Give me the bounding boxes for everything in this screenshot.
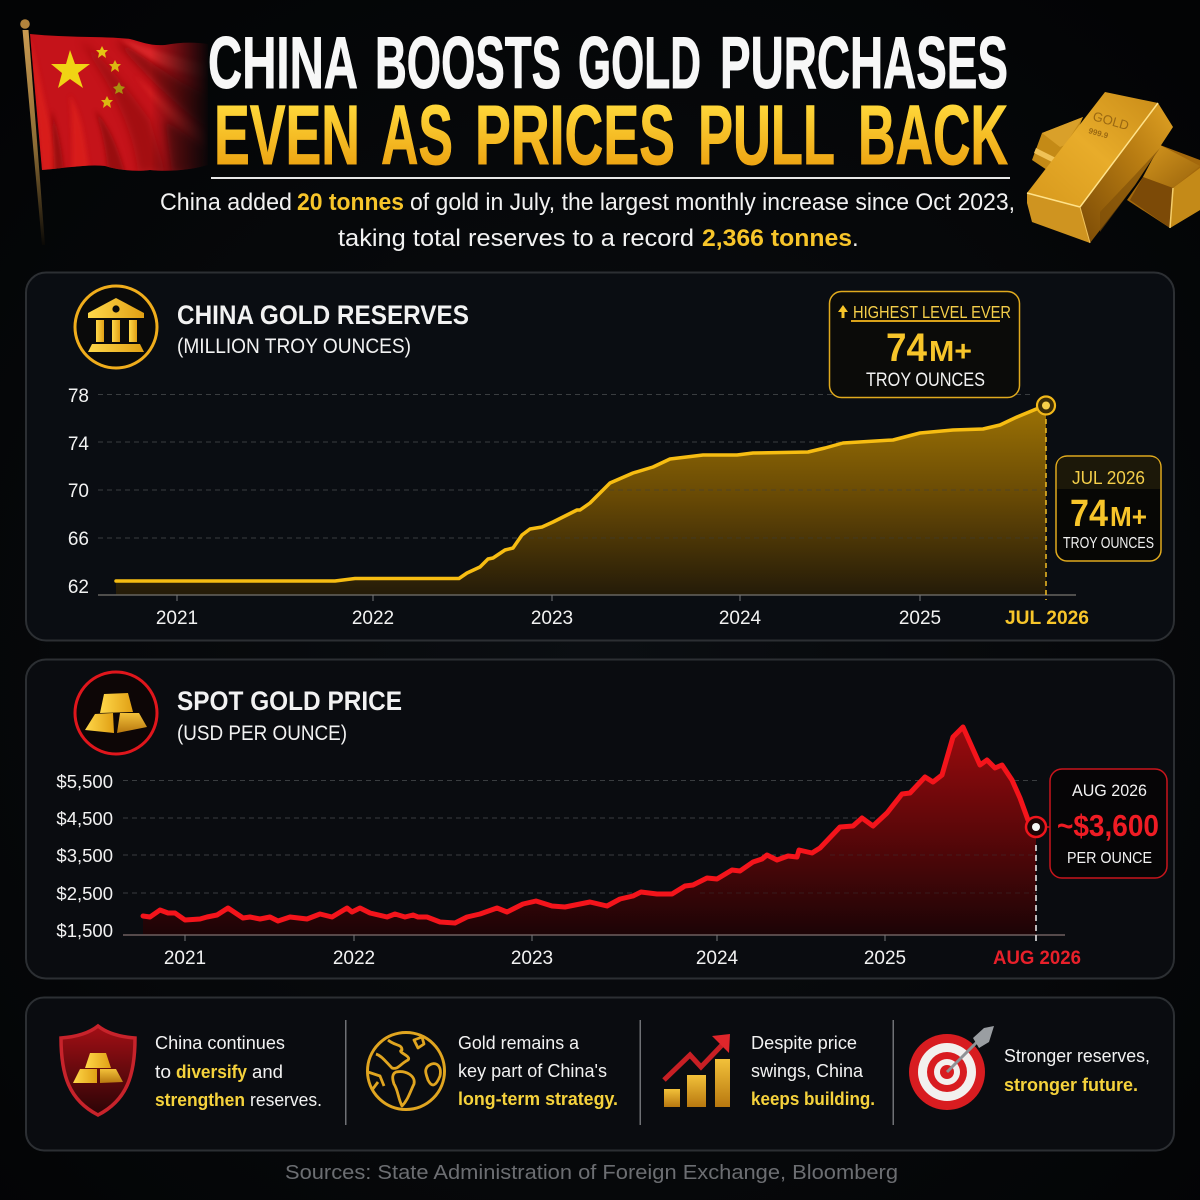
title line 1: GOLD [578, 23, 701, 104]
item: keeps building: keeps building. [751, 1088, 875, 1109]
callout: jul 2026: M+ [1110, 501, 1147, 532]
line chart: gold price: $3,500 [56, 845, 113, 866]
line chart: reserves [68, 386, 1089, 629]
line chart: gold price [56, 727, 1081, 969]
callout: highest level ever: HIGHEST LEVEL EVER [853, 302, 1011, 322]
item: diversify: diversify [176, 1061, 248, 1082]
line chart: gold price: AUG 2026 [993, 948, 1081, 969]
item: stronger future [909, 1026, 1150, 1110]
line chart: reserves: JUL 2026 [1005, 608, 1089, 629]
item: keeps building: Despite price [751, 1032, 857, 1053]
item: long-term strategy: key part of China's [458, 1060, 607, 1081]
title line 2: EVEN [214, 88, 360, 182]
icon: gold bars in red circle [75, 672, 157, 754]
heading: china gold reserves: CHINA GOLD RESERVES [177, 300, 469, 330]
line chart: gold price: $1,500 [56, 920, 113, 941]
line chart: reserves: 70 [68, 481, 89, 502]
icon: gold bars [1027, 92, 1200, 243]
item: diversify: strengthen [155, 1089, 245, 1110]
item: diversify: and [252, 1061, 283, 1082]
line chart: reserves: 78 [68, 386, 89, 407]
item: diversify: to [155, 1061, 171, 1082]
title line 1 [208, 23, 1008, 104]
icon: growth chart [664, 1034, 730, 1107]
item: keeps building: swings, China [751, 1060, 864, 1081]
callout: jul 2026: 74 [1070, 493, 1108, 535]
panel: china gold reserves [26, 272, 1174, 640]
subtitle [160, 189, 1015, 252]
line chart: reserves: 62 [68, 577, 89, 598]
panel: spot gold price [26, 660, 1174, 978]
callout: highest level ever: M+ [929, 336, 972, 368]
subtitle: 20 tonnes [297, 189, 404, 216]
title [208, 23, 1008, 182]
callout: jul 2026 [1056, 456, 1161, 561]
subtitle: China added [160, 189, 292, 216]
engraving: purity: 999.9 [1087, 126, 1110, 141]
line chart: reserves: 66 [68, 529, 89, 550]
item: long-term strategy: long-term strategy. [458, 1088, 618, 1109]
callout: aug 2026: ~$3,600 [1057, 808, 1159, 843]
item: stronger future: stronger future. [1004, 1074, 1138, 1095]
item: long-term strategy: Gold remains a [458, 1032, 580, 1053]
line chart: gold price: 2023 [511, 948, 553, 969]
item: keeps building [664, 1032, 875, 1109]
subtitle: taking total reserves to a record [338, 225, 694, 252]
line chart: gold price: 2025 [864, 948, 906, 969]
callout: highest level ever [830, 292, 1020, 398]
panel: key takeaways [26, 998, 1174, 1150]
unit label: (MILLION TROY OUNCES) [177, 335, 411, 358]
line chart: reserves: 2024 [719, 608, 762, 629]
subtitle: of gold in July, the largest monthly increase since Oct 2023, [410, 189, 1015, 216]
callout: highest level ever: TROY OUNCES [866, 370, 985, 391]
icon: bank [75, 286, 157, 368]
item: stronger future: Stronger reserves, [1004, 1045, 1150, 1066]
title line 1: BOOSTS [375, 23, 561, 104]
line chart: gold price: 2022 [333, 948, 375, 969]
item: long-term strategy [368, 1032, 618, 1110]
line chart: reserves: 2021 [156, 608, 198, 629]
title line 1: CHINA [208, 23, 358, 104]
icon: shield [61, 1026, 135, 1115]
line chart: gold price: 2021 [164, 948, 206, 969]
item: diversify: reserves. [250, 1089, 322, 1110]
item: diversify: China continues [155, 1032, 285, 1053]
title line 2: BACK [858, 88, 1008, 182]
line chart: reserves: 2023 [531, 608, 573, 629]
item: diversify [61, 1026, 322, 1115]
line chart: reserves: 2025 [899, 608, 941, 629]
line chart: gold price: $2,500 [56, 883, 113, 904]
icon: target [909, 1026, 994, 1110]
callout: jul 2026: JUL 2026 [1072, 468, 1145, 488]
callout: aug 2026 [1050, 769, 1167, 878]
line chart: gold price: $5,500 [56, 771, 113, 792]
callout: aug 2026: AUG 2026 [1072, 781, 1147, 800]
title line 1: PURCHASES [720, 23, 1008, 104]
icon: china flag [20, 19, 215, 245]
line chart: reserves: 2022 [352, 608, 394, 629]
callout: jul 2026: TROY OUNCES [1063, 535, 1154, 552]
title line 2 [214, 88, 1008, 182]
line chart: reserves: 74 [68, 434, 89, 455]
title line 2: AS [381, 88, 453, 182]
subtitle: 2,366 tonnes [702, 225, 852, 252]
line chart: gold price: $4,500 [56, 808, 113, 829]
callout: highest level ever: 74 [886, 326, 928, 370]
icon: globe [368, 1032, 444, 1110]
source note: Sources: State Administration of Foreign Exchange, Bloomberg [285, 1162, 898, 1184]
title line 2: PRICES [475, 88, 675, 182]
line chart: gold price: 2024 [696, 948, 739, 969]
heading: spot gold price: SPOT GOLD PRICE [177, 686, 402, 716]
unit label: (USD PER OUNCE) [177, 722, 347, 745]
callout: aug 2026: PER OUNCE [1067, 850, 1152, 867]
engraving: GOLD: GOLD [1091, 108, 1131, 133]
subtitle: . [852, 225, 859, 252]
title line 2: PULL [698, 88, 835, 182]
